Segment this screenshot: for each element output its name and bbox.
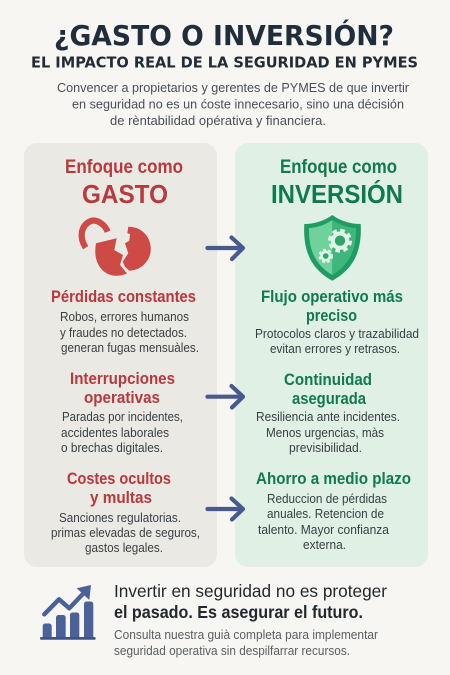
- item: costes ocultos y multas: primas elevadas de seguros,: [51, 525, 200, 540]
- item: interrupciones operativas: accidentes laborales: [61, 425, 169, 440]
- item: interrupciones operativas: o brechas digitales.: [61, 440, 163, 455]
- arrow 3: [208, 498, 243, 520]
- intro text: de rèntabilidad opérativa y financiera.: [110, 113, 326, 128]
- item: continuidad asegurada: Menos urgencias, màs: [266, 425, 384, 440]
- item: flujo operativo más preciso: Protocolos claros y trazabilidad: [255, 326, 419, 341]
- item: interrupciones operativas: [61, 370, 183, 455]
- call to action: [114, 628, 378, 658]
- item: pérdidas constantes: Robos, errores humanos: [60, 309, 189, 324]
- item: ahorro a medio plazo: [256, 470, 411, 552]
- heading: enfoque como gasto: Enfoque como: [65, 157, 183, 178]
- item: pérdidas constantes: y fraudes no detectados.: [60, 325, 187, 340]
- call to action: seguridad operativa sin despilfarrar recursos.: [114, 644, 350, 658]
- icon: shield with gears: [304, 215, 361, 281]
- item: flujo operativo más preciso: [255, 288, 419, 356]
- item: ahorro a medio plazo: talento. Mayor confianza: [258, 522, 390, 537]
- item: costes ocultos y multas: Sanciones regulatorias.: [59, 510, 181, 525]
- call to action: Consulta nuestra guià completa para implementar: [114, 628, 378, 642]
- intro text: Convencer a propietarios y gerentes de PYMES de que invertir: [57, 80, 410, 95]
- item: interrupciones operativas: Paradas por incidentes,: [62, 409, 183, 424]
- item: flujo operativo más preciso: Flujo operativo más: [261, 288, 403, 306]
- gear large: [330, 230, 350, 251]
- item: ahorro a medio plazo: Ahorro a medio plazo: [256, 470, 411, 488]
- item: continuidad asegurada: previsibilidad.: [289, 440, 362, 455]
- item: interrupciones operativas: Interrupciones: [70, 370, 175, 388]
- item: costes ocultos y multas: y multas: [90, 489, 152, 507]
- item: ahorro a medio plazo: externa.: [303, 537, 346, 552]
- item: continuidad asegurada: Continuidad: [284, 371, 372, 389]
- intro text: en seguridad no es un ćoste innecesario, sino una décisión: [72, 96, 404, 112]
- item: costes ocultos y multas: [51, 470, 200, 555]
- heading: enfoque como inversión: Enfoque como: [280, 157, 397, 178]
- item: flujo operativo más preciso: preciso: [306, 307, 357, 325]
- closing statement: Invertir en seguridad no es proteger: [114, 581, 387, 601]
- heading: enfoque como inversión: [271, 157, 403, 209]
- item: interrupciones operativas: operativas: [84, 389, 160, 407]
- header: [31, 18, 418, 128]
- gear small: [320, 250, 332, 262]
- subtitle: EL IMPACTO REAL DE LA SEGURIDAD EN PYMES: [31, 54, 418, 72]
- arrow 2: [208, 386, 243, 408]
- closing statement: [114, 581, 387, 622]
- arrow 1: [208, 238, 243, 259]
- icon: growth chart: [40, 585, 96, 640]
- item: flujo operativo más preciso: evitan errores y retrasos.: [270, 341, 400, 356]
- item: pérdidas constantes: Pérdidas constantes: [51, 288, 196, 306]
- icon: broken padlock: [82, 221, 151, 276]
- closing statement: el pasado. Es asegurar el futuro.: [114, 602, 363, 622]
- item: costes ocultos y multas: Costes ocultos: [67, 470, 171, 488]
- panel: enfoque como gasto: [24, 143, 217, 567]
- footer: [40, 581, 387, 658]
- item: continuidad asegurada: asegurada: [292, 390, 367, 408]
- item: pérdidas constantes: [51, 288, 199, 355]
- heading: enfoque como inversión: INVERSIÓN: [271, 179, 403, 209]
- title: ¿GASTO O INVERSIÓN?: [54, 18, 394, 52]
- heading: enfoque como gasto: GASTO: [82, 181, 168, 209]
- item: costes ocultos y multas: gastos legales.: [85, 540, 163, 555]
- item: continuidad asegurada: [256, 371, 400, 455]
- panel: enfoque como inversión: [235, 143, 428, 567]
- item: continuidad asegurada: Resiliencia ante incidentes.: [256, 409, 400, 424]
- item: ahorro a medio plazo: anuales. Retencion de: [267, 506, 384, 521]
- item: pérdidas constantes: generan fugas mensuàles.: [61, 340, 199, 355]
- intro text: [57, 80, 410, 128]
- heading: enfoque como gasto: [65, 157, 183, 209]
- item: ahorro a medio plazo: Reduccion de pérdidas: [267, 491, 387, 506]
